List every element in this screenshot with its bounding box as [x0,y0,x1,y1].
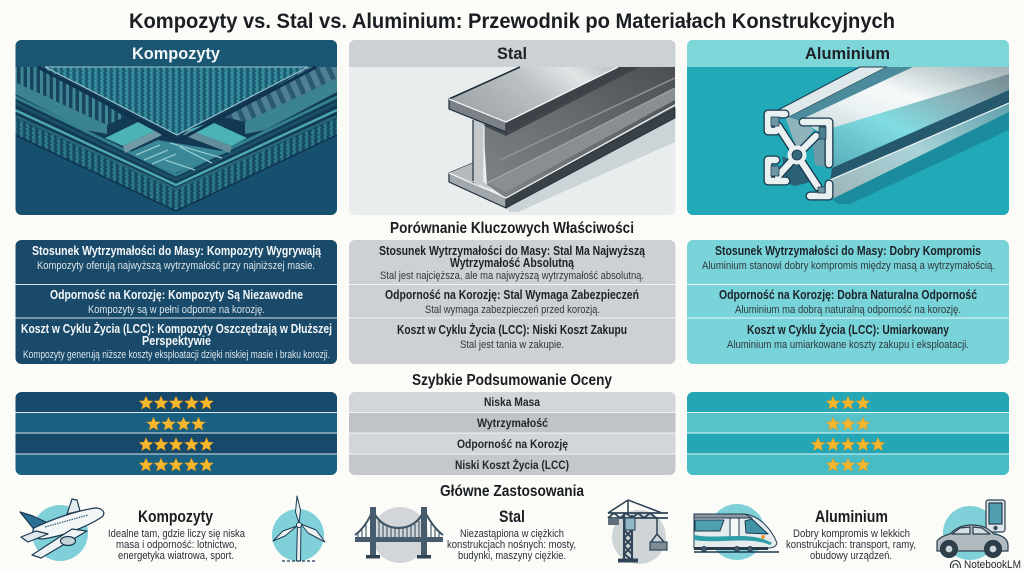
front face struts: outline [768,114,829,196]
stars rows [811,396,885,471]
panel: Kompozyty properties: Perspektywie [142,334,211,348]
text: Aluminium application: Aluminium [815,508,888,526]
panel: Aluminium properties [687,240,1009,364]
panel: Stal properties: Koszt w Cyklu Życia (LCC): Niski Koszt Zakupu [397,322,627,337]
panel: Kompozyty properties: Kompozyty oferują najwyższą wytrzymałość przy najniższej masie. [37,260,315,272]
panel: Aluminium properties: Koszt w Cyklu Życia (LCC): Umiarkowany [747,322,949,337]
shadow [830,108,1009,204]
text: Aluminium application: Dobry kompromis w lekkich [793,528,910,540]
panel: Kompozyty ratings [15,392,337,475]
panel: Aluminium illustration [687,40,1009,215]
panel: Stal properties: Odporność na Korozję: Stal Wymaga Zabezpieczeń [385,288,639,302]
shadow [506,118,675,212]
panel: Kompozyty illustration [15,40,337,215]
header text: Kompozyty [132,44,221,63]
panel: Aluminium properties: Odporność na Korozję: Dobra Naturalna Odporność [719,288,977,302]
icon: crane [608,500,668,564]
panel: criteria labels: Wytrzymałość [477,418,549,430]
icon: train [694,504,779,560]
text: Aluminium application: konstrukcjach: transport, ramy, [786,539,916,551]
icon: aluminium profile [768,67,1009,200]
woven core [128,140,228,173]
title: Kompozyty vs. Stal vs. Aluminium: Przewodnik po Materiałach Konstrukcyjnych [129,9,895,33]
panel: criteria labels: Niski Koszt Życia (LCC) [455,459,569,472]
header text: Stal [497,44,527,63]
icon: car and phone [937,500,1008,560]
header text: Aluminium [805,44,890,63]
left and right strips [15,67,125,125]
web face [483,67,675,198]
bottom flange [449,163,506,208]
text: Kompozyty application: Kompozyty [138,508,214,526]
top flange [449,67,618,122]
text: Stal application [447,508,576,562]
cell holes [771,117,779,126]
panel: Kompozyty properties: Kompozyty generują niższe koszty eksploatacji dzięki niskiej masie i braku korozji. [23,349,330,361]
web end [473,118,492,190]
panel: Stal illustration [349,40,676,215]
panel: Aluminium ratings [687,392,1009,475]
stacked layer edges [15,97,337,189]
panel: Stal properties: Wytrzymałość Absolutną [450,256,575,270]
front face back fill [786,117,814,146]
panel: Aluminium properties: Aluminium stanowi dobry kompromis między masą a wytrzymałością. [702,260,995,272]
panel: Stal properties: Stal jest najcięższa, ale ma najwyższą wytrzymałość absolutną. [380,270,644,282]
panel: Kompozyty properties: Stosunek Wytrzymałości do Masy: Kompozyty Wygrywają [32,244,322,258]
text: Stal application: Stal [499,508,525,526]
panel: Stal properties [349,240,676,364]
text: Kompozyty application: Idealne tam, gdzie liczy się niska [108,528,246,540]
panel: Stal properties: Stal jest tania w zakupie. [460,339,564,351]
teal tiles [105,122,157,146]
bottom carbon layer [15,117,337,211]
text: Kompozyty application [108,508,246,562]
heading: rating summary: Szybkie Podsumowanie Oceny [412,372,612,389]
top carbon plate [38,67,316,141]
panel: Kompozyty properties: Odporność na Korozję: Kompozyty Są Niezawodne [50,288,303,302]
icon: I-beam [449,67,675,208]
panel: criteria labels: Odporność na Korozję [457,439,568,451]
icon: suspension bridge [355,507,443,563]
stars rows [139,396,213,471]
text: Aluminium application: obudowy urządzeń. [810,550,892,562]
text: Aluminium application [786,508,916,562]
text: Kompozyty application: energetyka wiatrowa, sport. [118,550,234,562]
lower flange edge [506,108,675,208]
panel: Kompozyty properties [16,240,337,364]
icon: wind turbine [272,496,325,561]
panel: Stal properties: Stal wymaga zabezpieczeń przed korozją. [425,304,600,316]
text: Stal application: budynki, maszyny ciężkie. [458,550,566,562]
text: Stal application: Niezastąpiona w ciężkich [460,528,564,540]
panel: Aluminium properties: Stosunek Wytrzymałości do Masy: Dobry Kompromis [715,244,981,258]
heading: applications: Główne Zastosowania [440,483,584,500]
heading: properties: Porównanie Kluczowych Właściwości [390,220,634,237]
panel: Kompozyty properties: Kompozyty są w pełni odporne na korozję. [88,304,265,316]
panel: Kompozyty properties: Koszt w Cyklu Życia (LCC): Kompozyty Oszczędzają w Dłuższej [21,321,332,336]
dark underlay [15,67,337,190]
text: Stal application: konstrukcjach nośnych: mosty, [447,539,576,551]
panel: criteria labels: Niska Masa [484,397,541,409]
text: Kompozyty application: masa i odporność: lotnictwo, [116,539,237,551]
panel: Stal properties: Stosunek Wytrzymałości do Masy: Stal Ma Najwyższą [379,244,646,258]
icon: airplane [20,499,104,561]
panel: criteria labels [349,392,676,475]
panel: Aluminium properties: Aluminium ma dobrą naturalną odporność na korozję. [735,304,961,316]
panel: Aluminium properties: Aluminium ma umiarkowane koszty zakupu i eksploatacji. [727,339,969,351]
